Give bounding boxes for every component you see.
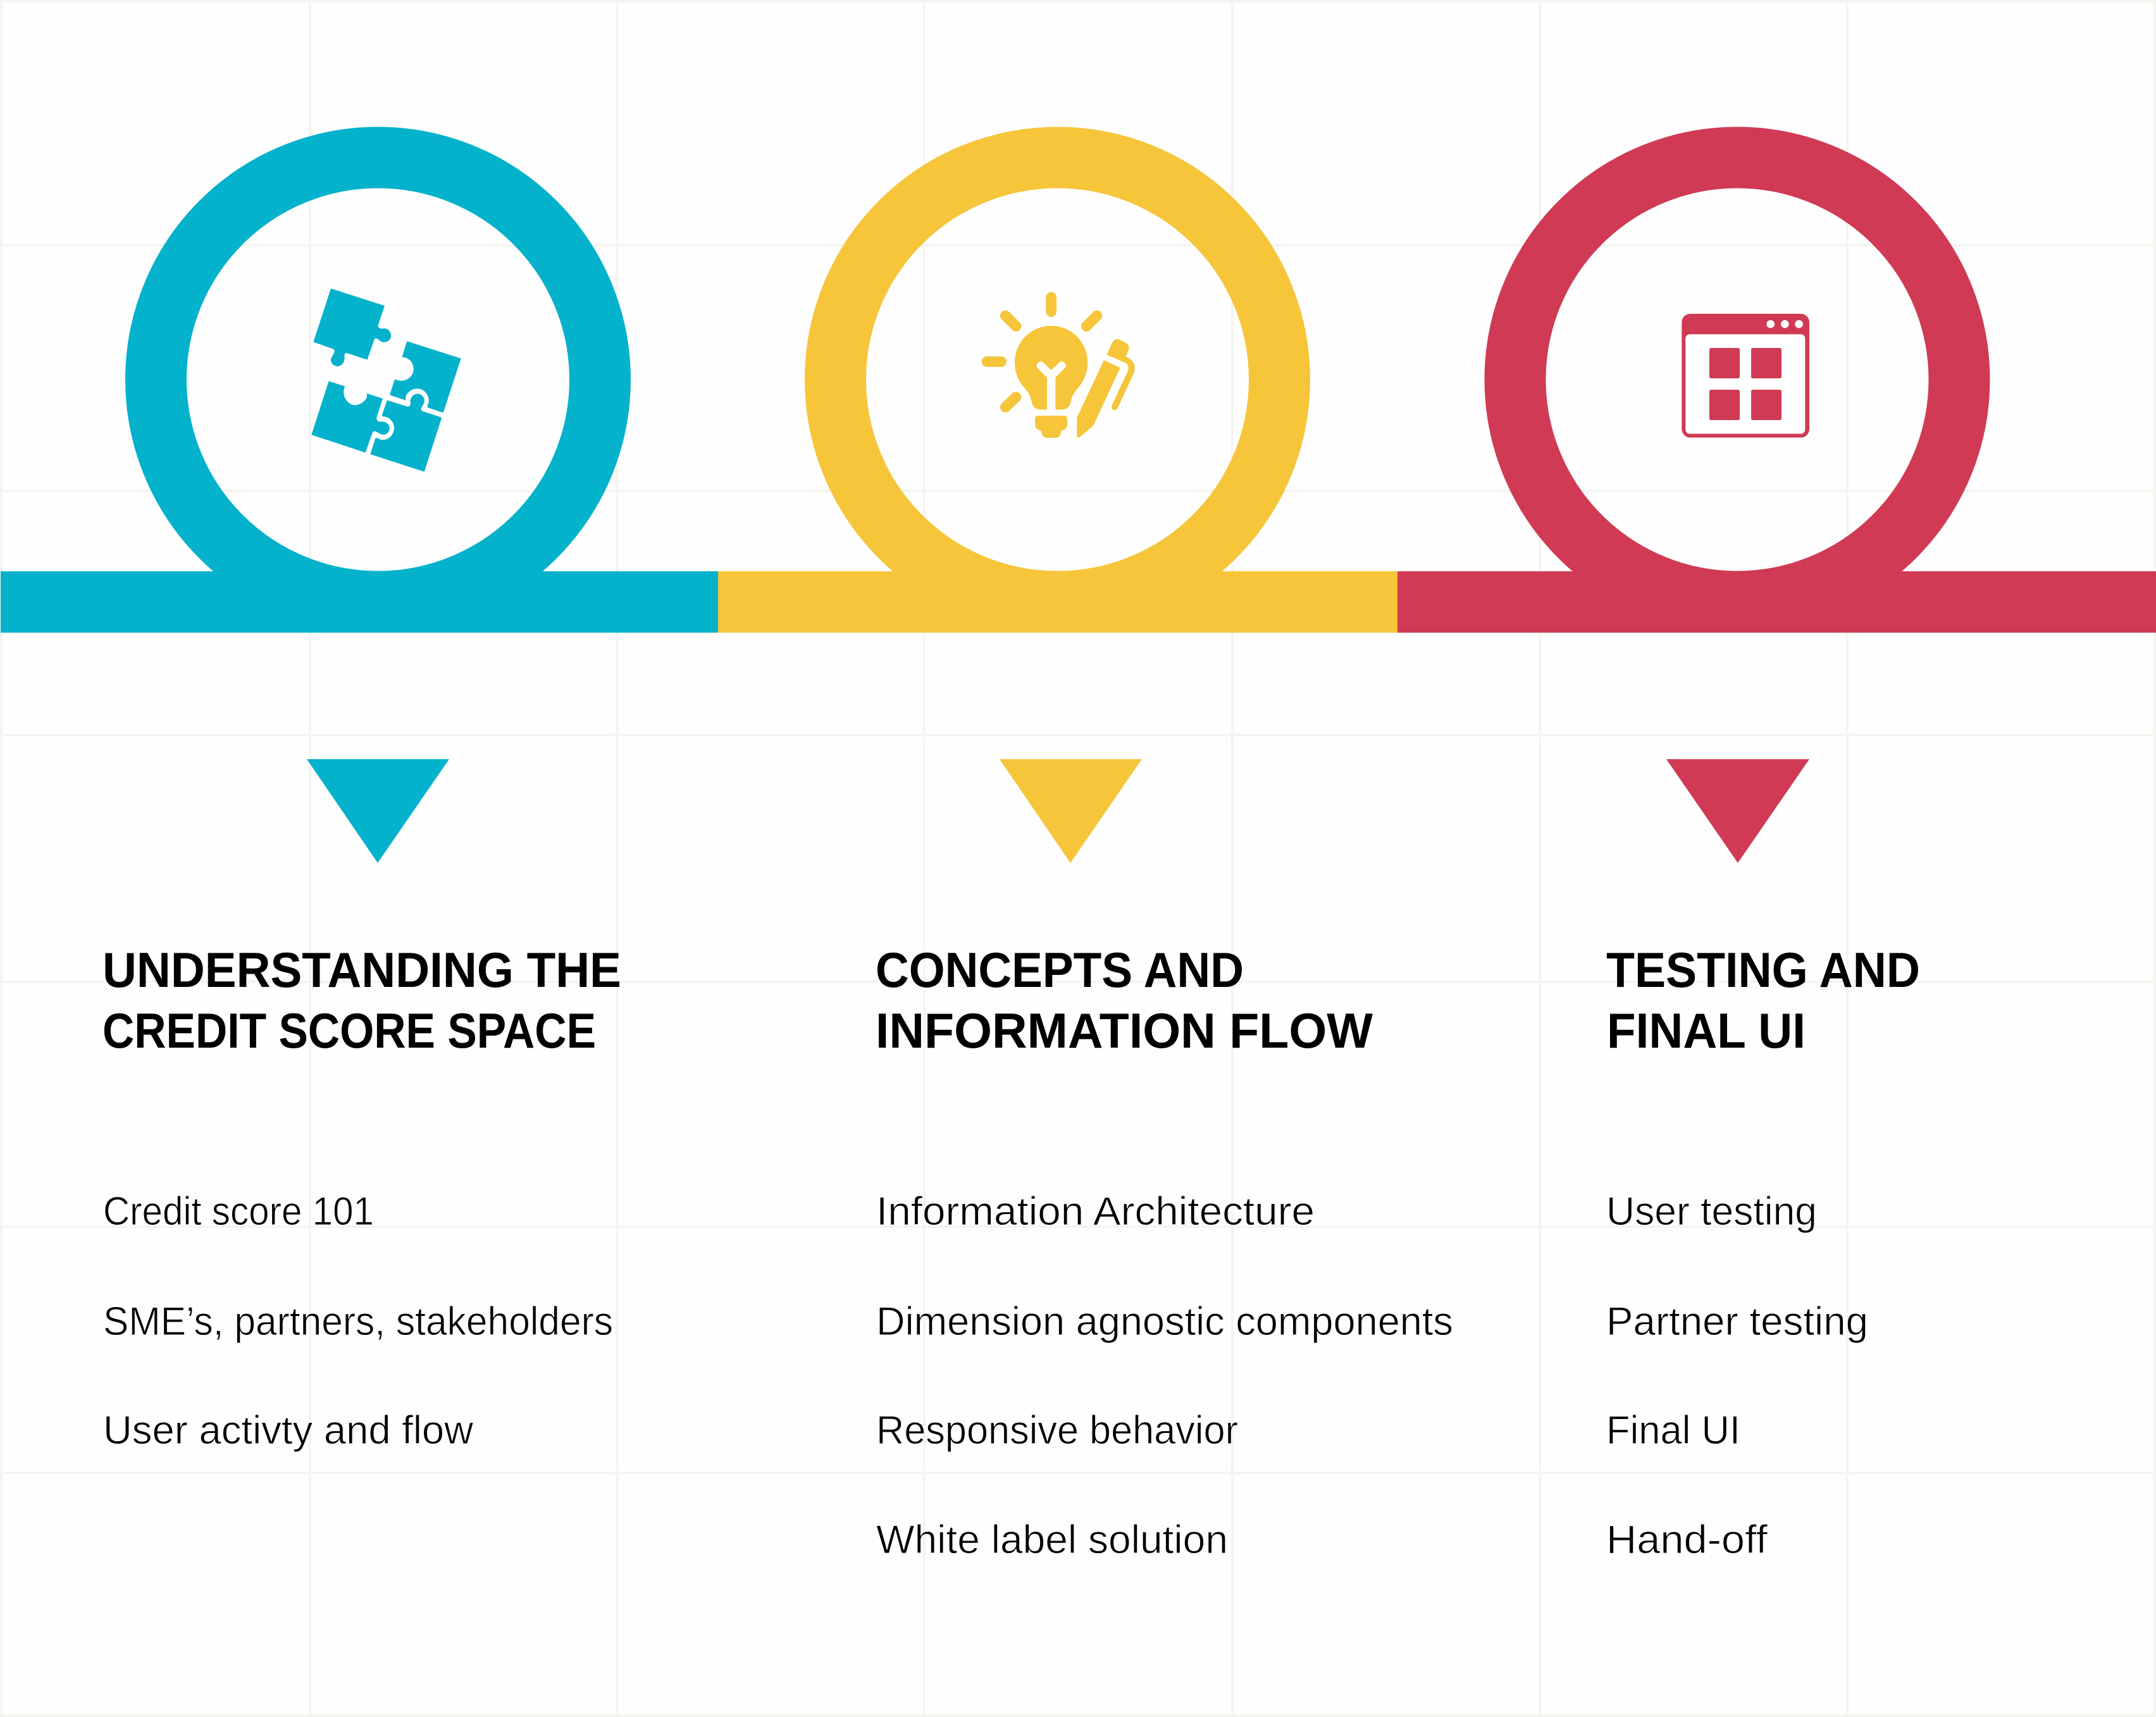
icon: puzzle pieces bbox=[311, 288, 461, 472]
heading: testing and final ui: TESTING AND bbox=[1606, 942, 1920, 998]
arrow: yellow triangle bbox=[1000, 759, 1142, 863]
list: testing items bbox=[1606, 1189, 1868, 1562]
heading: testing and final ui bbox=[1606, 942, 1920, 1058]
band: teal segment bbox=[1, 571, 718, 633]
heading: concepts and information flow: CONCEPTS AND bbox=[876, 942, 1244, 998]
list: understanding items: Credit score 101 bbox=[103, 1189, 374, 1234]
panel: understanding the credit score space bbox=[1, 158, 718, 1453]
band: yellow segment bbox=[718, 571, 1397, 633]
heading: understanding the credit score space: CREDIT SCORE SPACE bbox=[102, 1003, 596, 1058]
arrow: red triangle bbox=[1666, 759, 1809, 863]
arrow: teal triangle bbox=[307, 759, 449, 863]
heading: concepts and information flow: INFORMATION FLOW bbox=[876, 1003, 1373, 1058]
ring: teal circle bbox=[156, 158, 600, 602]
list: testing items: Partner testing bbox=[1606, 1299, 1868, 1344]
icon: app window grid bbox=[1682, 314, 1809, 438]
list: testing items: Hand-off bbox=[1606, 1518, 1768, 1562]
list: understanding items bbox=[103, 1189, 613, 1453]
band: red segment bbox=[1397, 571, 2156, 633]
list: concepts items: Dimension agnostic components bbox=[876, 1299, 1453, 1344]
heading: understanding the credit score space bbox=[102, 942, 621, 1058]
list: understanding items: SME’s, partners, stakeholders bbox=[103, 1299, 613, 1344]
ring: yellow circle bbox=[835, 158, 1279, 602]
list: testing items: Final UI bbox=[1606, 1408, 1740, 1453]
panel: testing and final ui bbox=[1397, 158, 2156, 1562]
heading: understanding the credit score space: UNDERSTANDING THE bbox=[102, 942, 621, 998]
icon: light bulb and pen bbox=[987, 297, 1135, 438]
heading: concepts and information flow bbox=[876, 942, 1373, 1058]
panel: concepts and information flow bbox=[718, 158, 1453, 1562]
ring: red circle bbox=[1515, 158, 1959, 602]
list: understanding items: User activty and flow bbox=[103, 1408, 473, 1453]
list: concepts items bbox=[876, 1189, 1453, 1562]
heading: testing and final ui: FINAL UI bbox=[1607, 1003, 1806, 1058]
list: concepts items: Responsive behavior bbox=[876, 1408, 1238, 1453]
list: testing items: User testing bbox=[1606, 1189, 1817, 1234]
list: concepts items: White label solution bbox=[876, 1518, 1228, 1562]
list: concepts items: Information Architecture bbox=[876, 1189, 1315, 1234]
